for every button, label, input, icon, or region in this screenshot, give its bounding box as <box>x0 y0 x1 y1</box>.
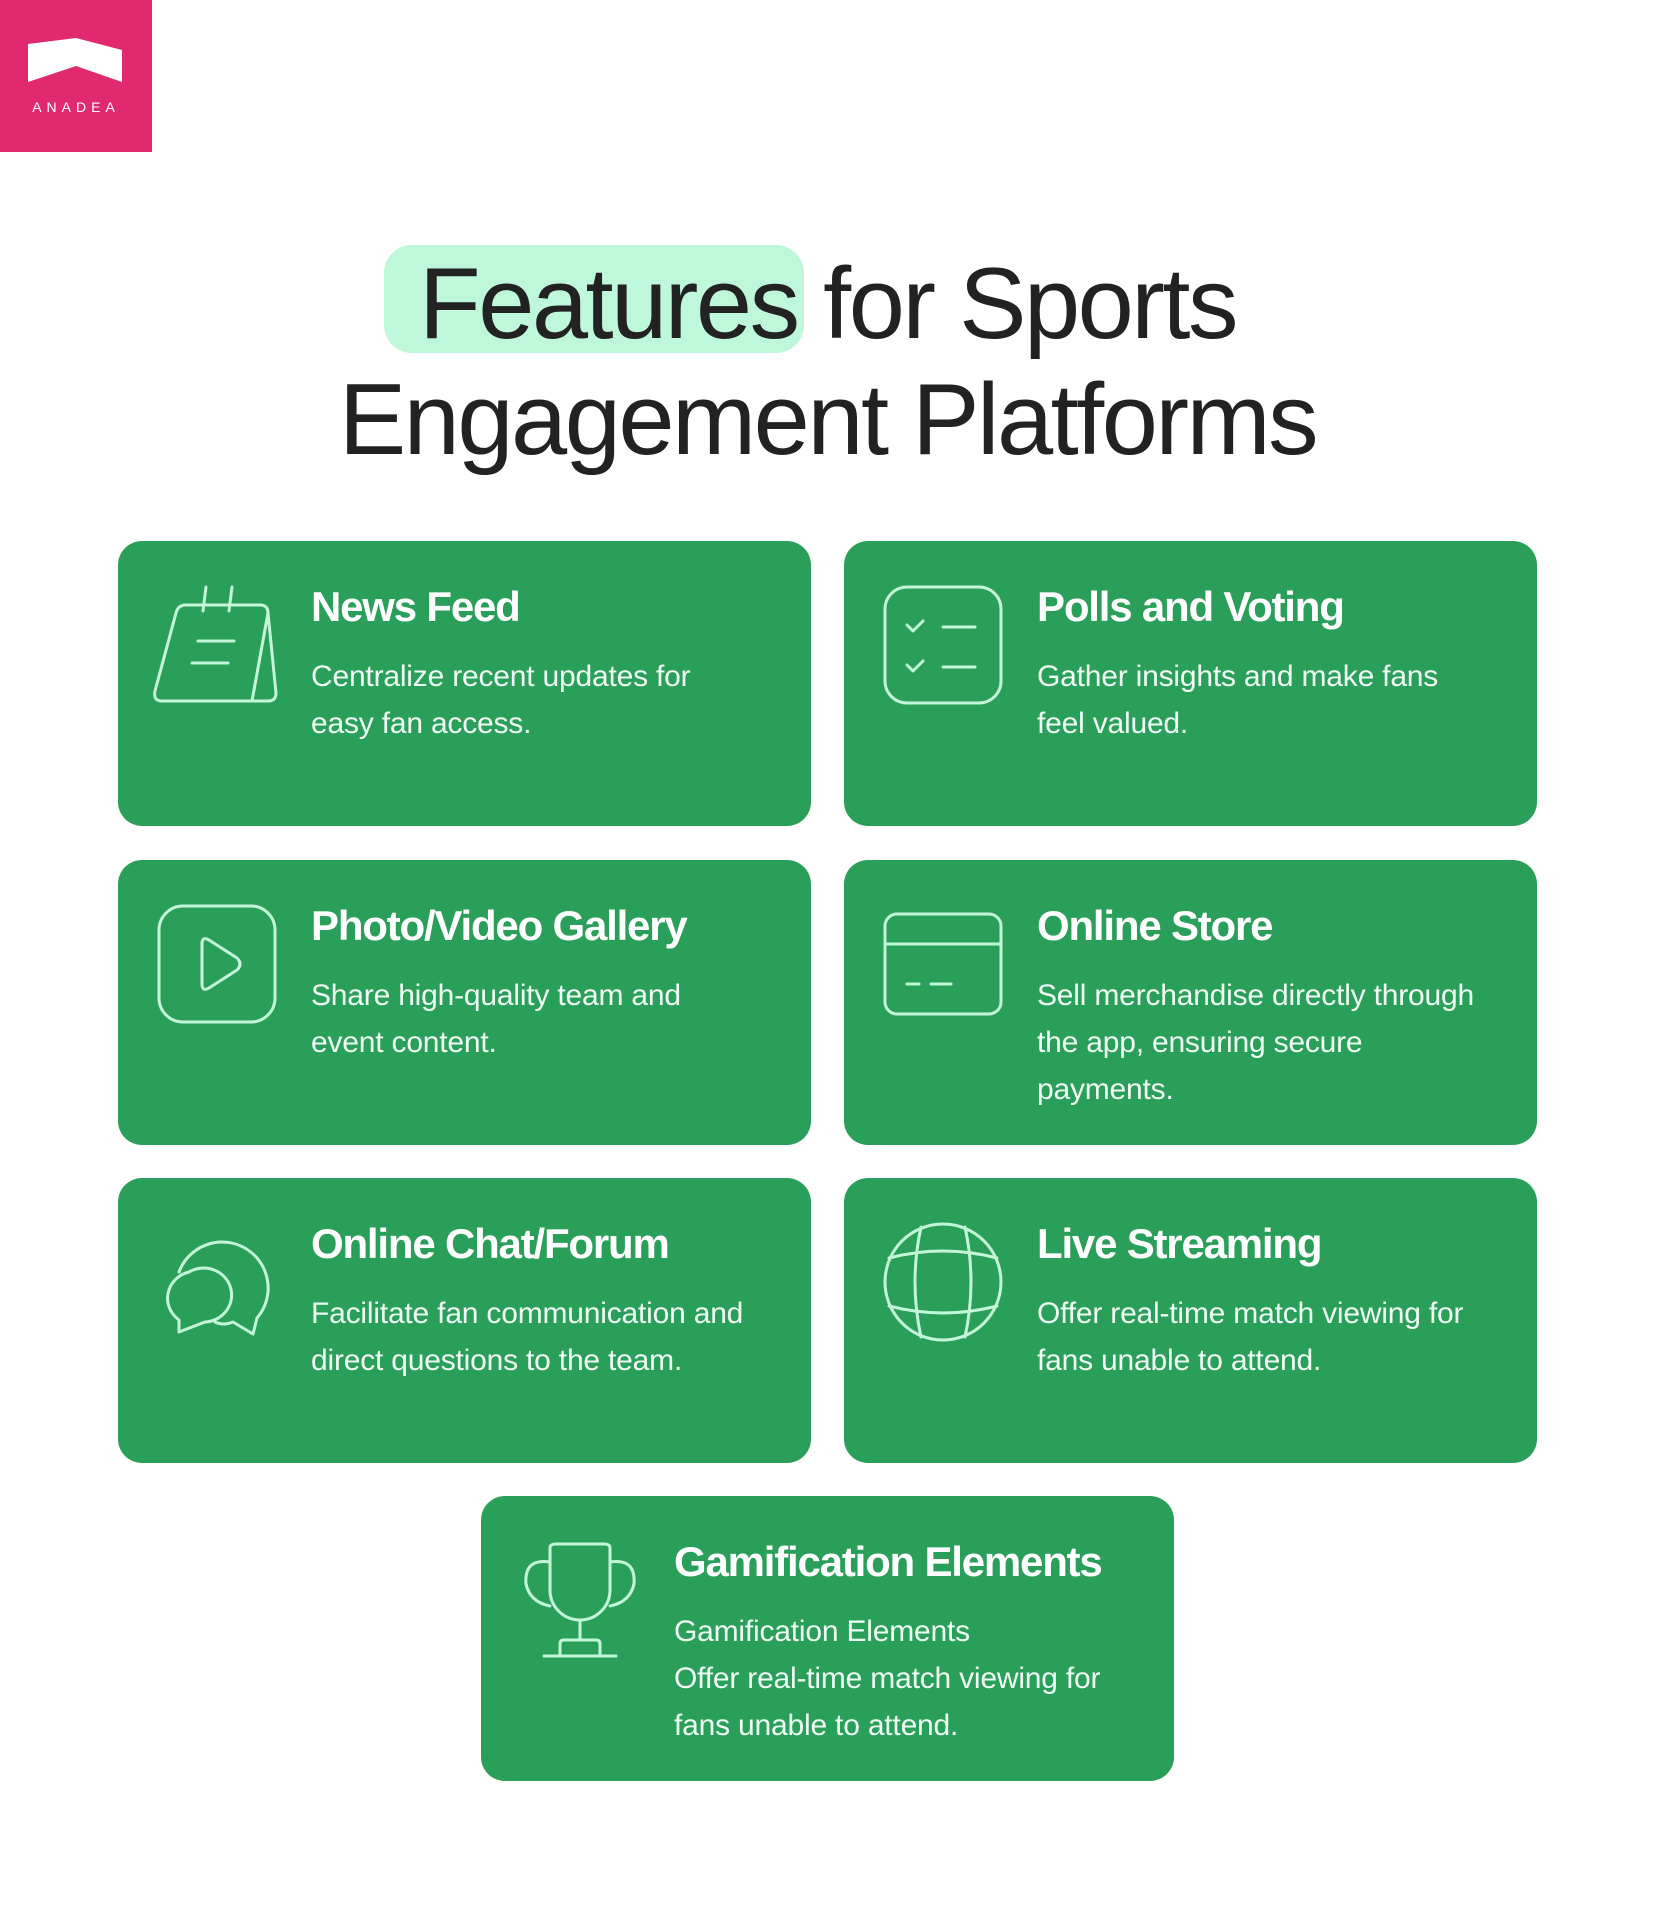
panel: gallery <box>118 860 811 1145</box>
panel: gamification: Offer real-time match viewing for <box>674 1662 1100 1695</box>
panel: store <box>844 860 1537 1145</box>
panel: live streaming: Offer real-time match viewing for <box>1037 1297 1463 1330</box>
icon: play <box>158 904 276 1024</box>
panel: news feed: News Feed <box>311 583 520 630</box>
panel: news feed <box>118 541 811 826</box>
icon: globe <box>884 1222 1002 1342</box>
panel: store: Online Store <box>1037 902 1272 949</box>
icon: chat bubbles <box>166 1240 270 1336</box>
icon: calendar <box>153 586 278 702</box>
icon: card <box>884 912 1002 1016</box>
panel: polls: feel valued. <box>1037 707 1188 740</box>
title <box>339 248 1316 476</box>
panel: news feed: easy fan access. <box>311 707 531 740</box>
panel: chat <box>118 1178 811 1463</box>
icon: checklist <box>884 586 1002 704</box>
panel: gamification <box>481 1496 1174 1781</box>
panel: gamification: Gamification Elements <box>674 1538 1102 1585</box>
panel: gallery: Share high-quality team and <box>311 979 681 1012</box>
title: Engagement Platforms <box>339 364 1316 476</box>
panel: store: Sell merchandise directly through <box>1037 979 1474 1012</box>
panel: chat: Facilitate fan communication and <box>311 1297 743 1330</box>
panel: gamification: Gamification Elements <box>674 1615 970 1648</box>
panel: polls: Polls and Voting <box>1037 583 1344 630</box>
panel: store: the app, ensuring secure <box>1037 1026 1362 1059</box>
panel: chat: Online Chat/Forum <box>311 1220 669 1267</box>
panel: live streaming <box>844 1178 1537 1463</box>
logo: ANADEA <box>32 99 120 115</box>
panel: polls: Gather insights and make fans <box>1037 660 1438 693</box>
panel: gallery: event content. <box>311 1026 497 1059</box>
panel: gallery: Photo/Video Gallery <box>311 902 687 949</box>
panel: news feed: Centralize recent updates for <box>311 660 690 693</box>
panel: live streaming: fans unable to attend. <box>1037 1344 1321 1377</box>
icon: trophy <box>524 1542 636 1658</box>
panel: chat: direct questions to the team. <box>311 1344 682 1377</box>
panel: live streaming: Live Streaming <box>1037 1220 1321 1267</box>
title highlight <box>384 245 804 353</box>
panel: polls <box>844 541 1537 826</box>
panel: store: payments. <box>1037 1073 1174 1106</box>
title: Features for Sports <box>419 248 1236 360</box>
panel: gamification: fans unable to attend. <box>674 1709 958 1742</box>
logo <box>0 0 152 152</box>
